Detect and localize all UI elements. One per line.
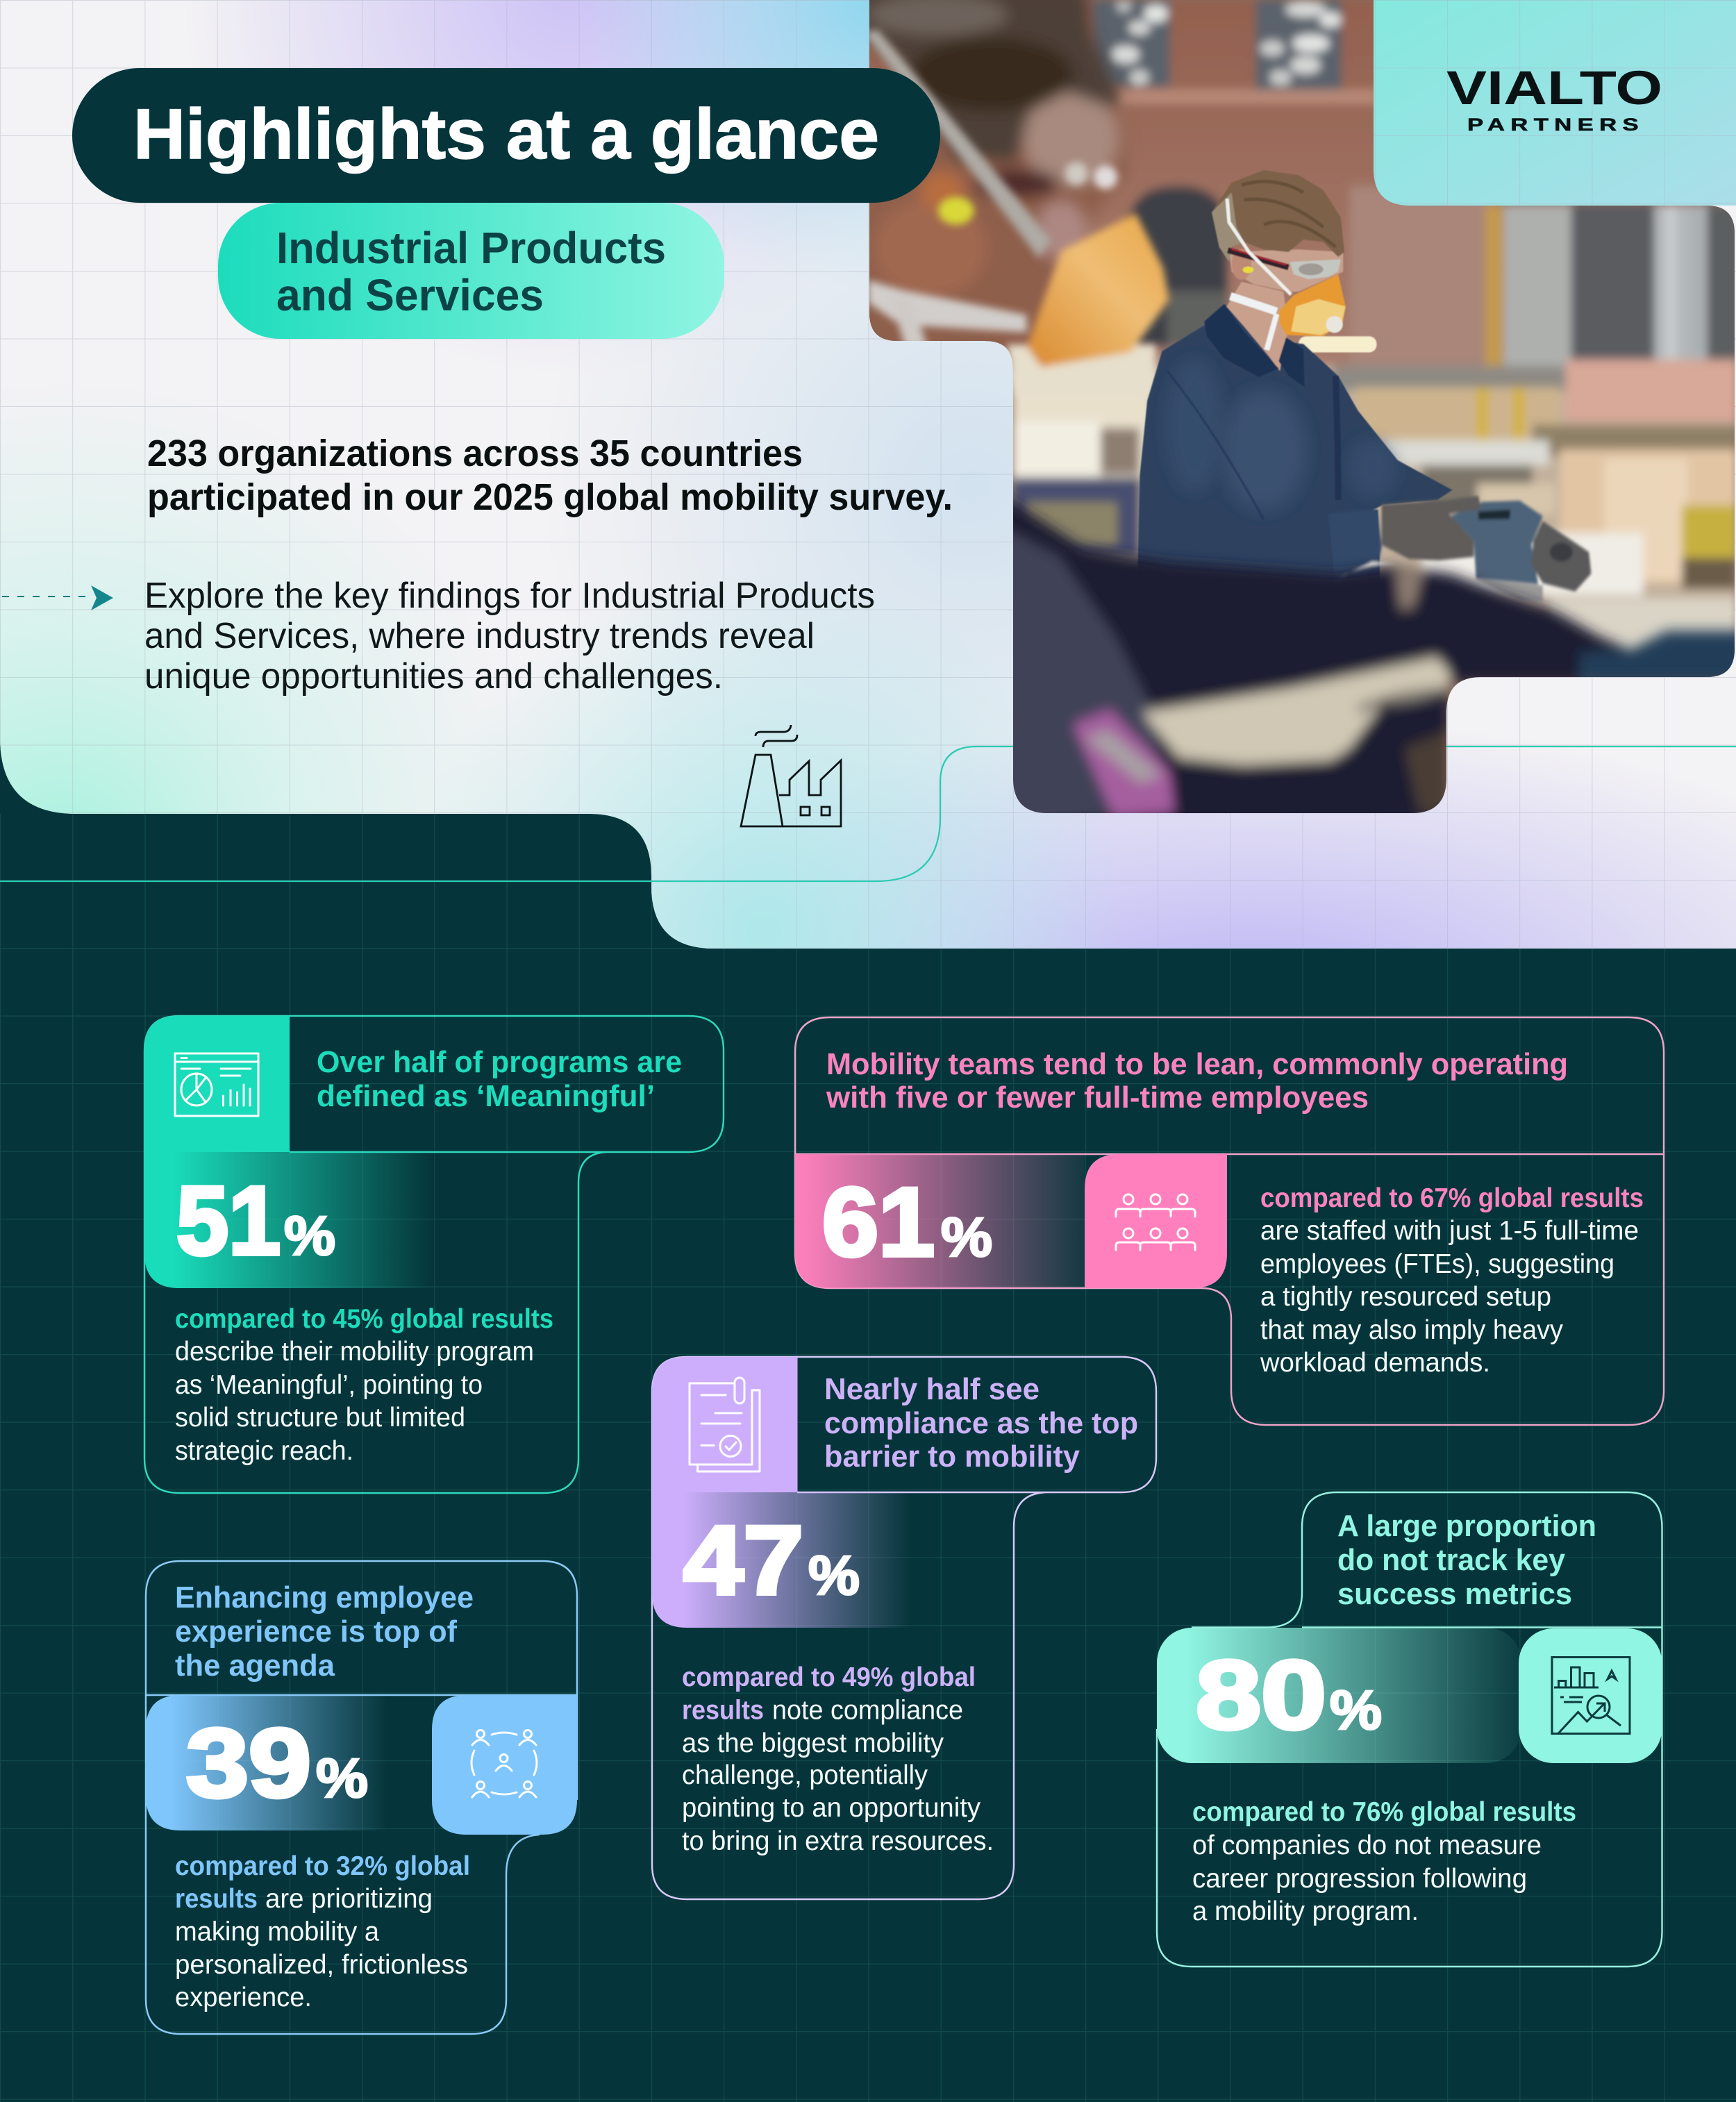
logo: Vialto Partners: VIALTO xyxy=(1446,61,1662,115)
intro paragraph: and Services, where industry trends reveal xyxy=(144,616,815,656)
intro paragraph: Explore the key findings for Industrial Products xyxy=(144,576,875,616)
heading xyxy=(1337,1509,1596,1611)
logo: Vialto Partners: PARTNERS xyxy=(1467,115,1644,135)
stat 61%: 61 xyxy=(822,1167,935,1276)
body text xyxy=(682,1662,994,1856)
heading: do not track key xyxy=(1337,1543,1566,1577)
gloved hands and sander xyxy=(1331,496,1591,602)
body text: a mobility program. xyxy=(1192,1896,1419,1926)
stat gradient band xyxy=(652,1492,911,1628)
photo: workers sanding in an industrial workshop xyxy=(869,0,1735,813)
survey statement: participated in our 2025 global mobility survey. xyxy=(147,476,953,518)
body text: compared to 45% global results xyxy=(175,1304,553,1334)
stat 39%: % xyxy=(316,1747,368,1809)
stat 47%: % xyxy=(808,1544,860,1606)
stat gradient band xyxy=(1157,1628,1521,1763)
stat gradient band xyxy=(144,1152,433,1288)
icon block xyxy=(144,1016,290,1152)
heading xyxy=(826,1047,1568,1115)
heading xyxy=(317,1045,682,1113)
panel: card 80% success metrics xyxy=(1157,1492,1662,1967)
heading: Enhancing employee xyxy=(175,1580,474,1615)
heading: experience is top of xyxy=(175,1615,457,1649)
heading: compliance as the top xyxy=(824,1406,1138,1440)
body text: results xyxy=(175,1884,258,1914)
card outline xyxy=(146,1561,577,2034)
hero light gradient panel xyxy=(0,0,1736,972)
blurred foreground arm xyxy=(994,490,1736,832)
intro paragraph xyxy=(144,576,875,697)
logo panel background xyxy=(1374,0,1736,206)
body text: that may also imply heavy xyxy=(1260,1315,1563,1345)
icon: compliance document xyxy=(690,1378,760,1471)
heading: Mobility teams tend to be lean, commonly operating xyxy=(826,1047,1568,1081)
stat 47% xyxy=(683,1505,860,1615)
body text: employees (FTEs), suggesting xyxy=(1260,1249,1614,1279)
body text xyxy=(175,1851,470,2012)
body text: strategic reach. xyxy=(175,1436,353,1466)
heading: Over half of programs are xyxy=(317,1045,682,1079)
body text: are staffed with just 1-5 full-time xyxy=(1260,1216,1639,1246)
stat 80% xyxy=(1196,1640,1382,1749)
subtitle pill: Industrial Products xyxy=(276,223,666,273)
stat 39% xyxy=(186,1708,368,1817)
blurred foreground head xyxy=(853,0,1169,397)
card outline xyxy=(144,1016,724,1493)
survey statement xyxy=(147,433,953,518)
body text: are prioritizing xyxy=(265,1884,433,1914)
card outline xyxy=(652,1357,1156,1899)
title pill: Highlights at a glance xyxy=(133,94,879,174)
stat 51%: 51 xyxy=(176,1166,281,1275)
stat gradient band xyxy=(146,1695,387,1830)
body text: of companies do not measure xyxy=(1192,1830,1542,1860)
stat 61%: % xyxy=(941,1206,992,1268)
body text: describe their mobility program xyxy=(175,1337,534,1367)
logo: Vialto Partners xyxy=(1446,61,1662,135)
body text: compared to 32% global xyxy=(175,1851,470,1881)
stat 80%: % xyxy=(1330,1679,1382,1741)
body text: as ‘Meaningful’, pointing to xyxy=(175,1370,483,1400)
intro paragraph: unique opportunities and challenges. xyxy=(144,656,723,697)
icon: dashboard xyxy=(175,1053,258,1116)
icon block xyxy=(1519,1628,1662,1763)
body text: a tightly resourced setup xyxy=(1260,1282,1551,1312)
stat gradient band xyxy=(795,1154,1085,1288)
stat 61% xyxy=(822,1167,992,1276)
icon: team xyxy=(1116,1194,1195,1250)
body text: as the biggest mobility xyxy=(682,1728,944,1758)
dark background grid xyxy=(0,814,1736,2102)
body text: note compliance xyxy=(772,1696,963,1725)
subtitle pill xyxy=(218,203,724,339)
body text xyxy=(175,1304,553,1466)
connector line in hero xyxy=(0,746,1736,881)
icon: factory xyxy=(741,725,841,826)
body text: compared to 76% global results xyxy=(1192,1797,1576,1827)
card outline xyxy=(1157,1492,1662,1967)
card outline xyxy=(795,1017,1664,1425)
body text: compared to 49% global xyxy=(682,1662,976,1692)
survey statement: 233 organizations across 35 countries xyxy=(147,433,803,474)
icon block xyxy=(1085,1154,1227,1288)
body text: solid structure but limited xyxy=(175,1403,465,1433)
heading: with five or fewer full-time employees xyxy=(826,1081,1369,1115)
heading xyxy=(175,1580,474,1683)
body text: challenge, potentially xyxy=(682,1760,928,1790)
heading: A large proportion xyxy=(1337,1509,1596,1543)
panel: card 61% lean teams xyxy=(795,1017,1664,1425)
body text: to bring in extra resources. xyxy=(682,1826,994,1856)
heading: Nearly half see xyxy=(824,1372,1040,1406)
panel: card 39% employee experience xyxy=(146,1561,577,2034)
heading xyxy=(824,1372,1138,1474)
body text: pointing to an opportunity xyxy=(682,1793,980,1823)
heading: the agenda xyxy=(175,1649,335,1683)
stat 51%: % xyxy=(284,1205,335,1267)
icon block xyxy=(432,1695,577,1835)
stat 80%: 80 xyxy=(1196,1640,1326,1749)
stat 47%: 47 xyxy=(683,1505,803,1615)
heading: barrier to mobility xyxy=(824,1440,1080,1474)
stat 51% xyxy=(176,1166,335,1275)
heading: defined as ‘Meaningful’ xyxy=(317,1079,655,1113)
panel: card 51% meaningful programs xyxy=(144,1016,724,1493)
body text: personalized, frictionless xyxy=(175,1950,468,1980)
body text: making mobility a xyxy=(175,1917,379,1947)
icon: people circle xyxy=(471,1730,537,1797)
title pill xyxy=(72,68,940,203)
icon: analytics chart xyxy=(1552,1657,1630,1733)
body text: workload demands. xyxy=(1260,1348,1490,1378)
body text xyxy=(1260,1183,1644,1378)
body text: experience. xyxy=(175,1983,312,2012)
sharp worker xyxy=(1137,170,1452,587)
body text: compared to 67% global results xyxy=(1260,1183,1644,1213)
heading: success metrics xyxy=(1337,1577,1572,1611)
body text: career progression following xyxy=(1192,1864,1527,1894)
dashed arrow xyxy=(2,585,113,610)
stat 39%: 39 xyxy=(186,1708,311,1817)
subtitle pill: and Services xyxy=(276,270,544,320)
icon block xyxy=(652,1357,797,1492)
panel: card 47% compliance xyxy=(652,1357,1156,1899)
body text: results xyxy=(682,1696,764,1725)
body text xyxy=(1192,1797,1576,1926)
logo panel grid xyxy=(1374,0,1736,206)
